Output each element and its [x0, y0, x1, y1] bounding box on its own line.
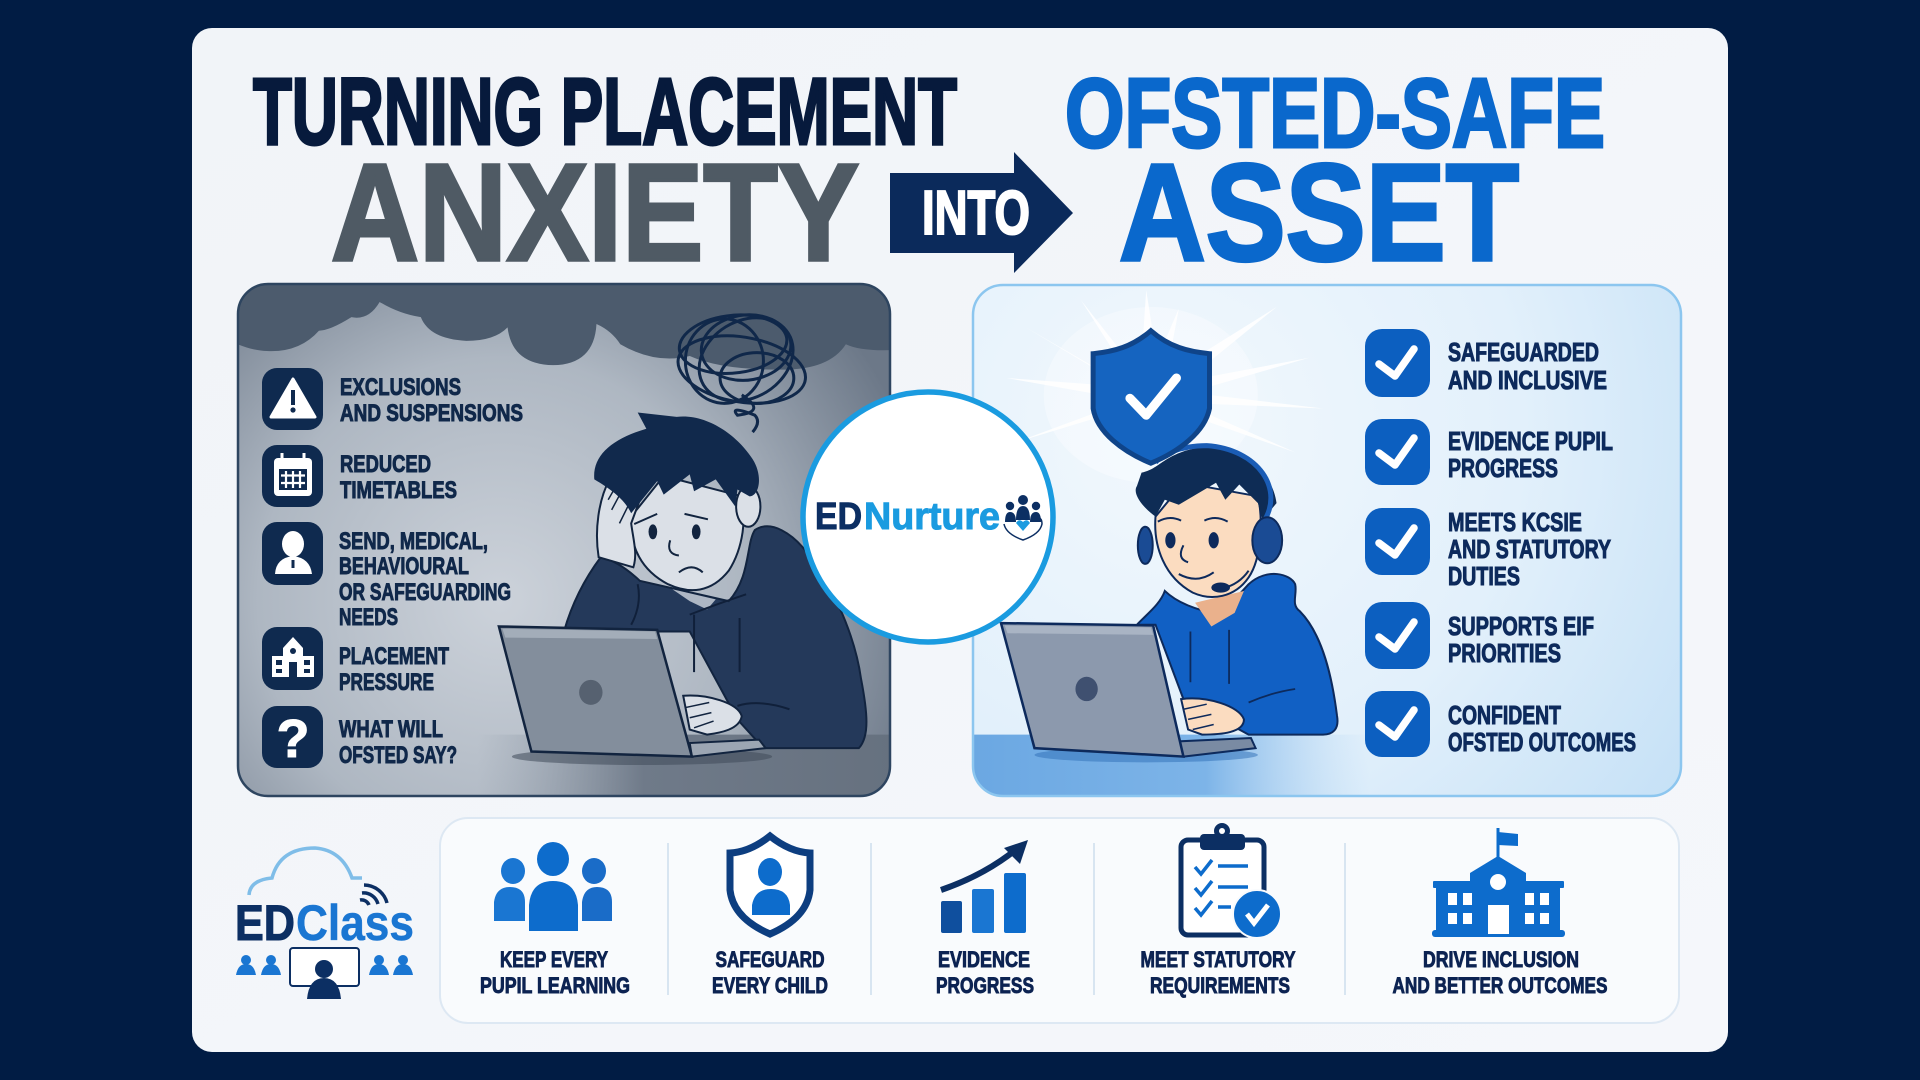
item: send needs: BEHAVIOURAL [339, 553, 469, 580]
item: reduced timetables: TIMETABLES [340, 477, 457, 504]
item: placement pressure [262, 627, 449, 696]
illustration: confident student [960, 290, 1370, 799]
item: send needs: NEEDS [339, 604, 398, 631]
item: supports eif [1365, 602, 1594, 669]
heading: turning placement: TURNING PLACEMENT [253, 59, 957, 165]
item: safeguarded: SAFEGUARDED [1448, 339, 1599, 367]
item: safeguard every child: SAFEGUARD [716, 947, 824, 972]
logo: EDClass: ED [235, 895, 295, 951]
icon: family heart [1004, 495, 1042, 540]
item: evidence pupil progress: PROGRESS [1448, 455, 1558, 483]
item: drive inclusion [1392, 828, 1608, 998]
item: reduced timetables: REDUCED [340, 451, 431, 478]
item: supports eif: SUPPORTS EIF [1448, 613, 1594, 641]
panel: commitments strip [440, 818, 1679, 1023]
item: confident outcomes: CONFIDENT [1448, 702, 1561, 730]
item: drive inclusion: DRIVE INCLUSION [1423, 947, 1579, 972]
item: safeguard every child: EVERY CHILD [712, 973, 828, 998]
item: what will ofsted say [262, 706, 457, 769]
heading: asset: ASSET [1119, 136, 1519, 290]
item: exclusions: EXCLUSIONS [340, 374, 461, 401]
item: placement pressure: PRESSURE [339, 669, 434, 696]
illustration: anxious student [230, 280, 907, 799]
panel: asset [960, 285, 1681, 799]
item: confident outcomes [1365, 691, 1636, 757]
item: evidence progress: PROGRESS [936, 973, 1034, 998]
item: meet statutory requirements [1140, 823, 1296, 998]
item: exclusions [262, 368, 523, 430]
item: evidence pupil progress [1365, 419, 1613, 485]
logo: EDClass: Class [296, 895, 414, 951]
item: keep every pupil learning [480, 842, 630, 998]
item: supports eif: PRIORITIES [1448, 640, 1561, 668]
badge: EDNurture logo [803, 392, 1053, 642]
item: send needs: OR SAFEGUARDING [339, 579, 511, 606]
item: safeguard every child [712, 836, 828, 998]
heading: anxiety: ANXIETY [331, 136, 859, 290]
item: what will ofsted say: WHAT WILL [339, 716, 443, 743]
item: evidence pupil progress: EVIDENCE PUPIL [1448, 428, 1613, 456]
item: meet statutory requirements: MEET STATUTORY [1140, 947, 1296, 972]
item: evidence progress [936, 840, 1034, 998]
item: keep every pupil learning: KEEP EVERY [500, 947, 608, 972]
item: confident outcomes: OFSTED OUTCOMES [1448, 729, 1636, 757]
item: meets kcsie: DUTIES [1448, 563, 1520, 591]
item: placement pressure: PLACEMENT [339, 643, 449, 670]
title [253, 58, 1605, 290]
item: keep every pupil learning: PUPIL LEARNING [480, 973, 630, 998]
item: meets kcsie [1365, 508, 1611, 591]
item: meets kcsie: AND STATUTORY [1448, 536, 1611, 564]
item: meets kcsie: MEETS KCSIE [1448, 509, 1582, 537]
item: reduced timetables [262, 445, 457, 507]
item: what will ofsted say: OFSTED SAY? [339, 742, 457, 769]
badge: EDNurture logo: ED [815, 496, 862, 538]
arrow: into [890, 152, 1073, 273]
arrow: into: INTO [922, 179, 1030, 248]
panel: anxiety [230, 280, 907, 799]
item: send needs: SEND, MEDICAL, [339, 528, 488, 555]
item: meet statutory requirements: REQUIREMENTS [1150, 973, 1290, 998]
item: evidence progress: EVIDENCE [938, 947, 1030, 972]
item: what will ofsted say: ? [276, 709, 310, 769]
logo: EDClass [235, 848, 414, 999]
item: safeguarded [1365, 329, 1607, 397]
item: drive inclusion: AND BETTER OUTCOMES [1392, 973, 1608, 998]
item: safeguarded: AND INCLUSIVE [1448, 367, 1607, 395]
item: exclusions: AND SUSPENSIONS [340, 400, 523, 427]
heading: ofsted-safe: OFSTED-SAFE [1065, 58, 1605, 168]
badge: EDNurture logo: Nurture [864, 496, 1000, 538]
main card [192, 28, 1728, 1052]
item: send needs [262, 522, 511, 631]
